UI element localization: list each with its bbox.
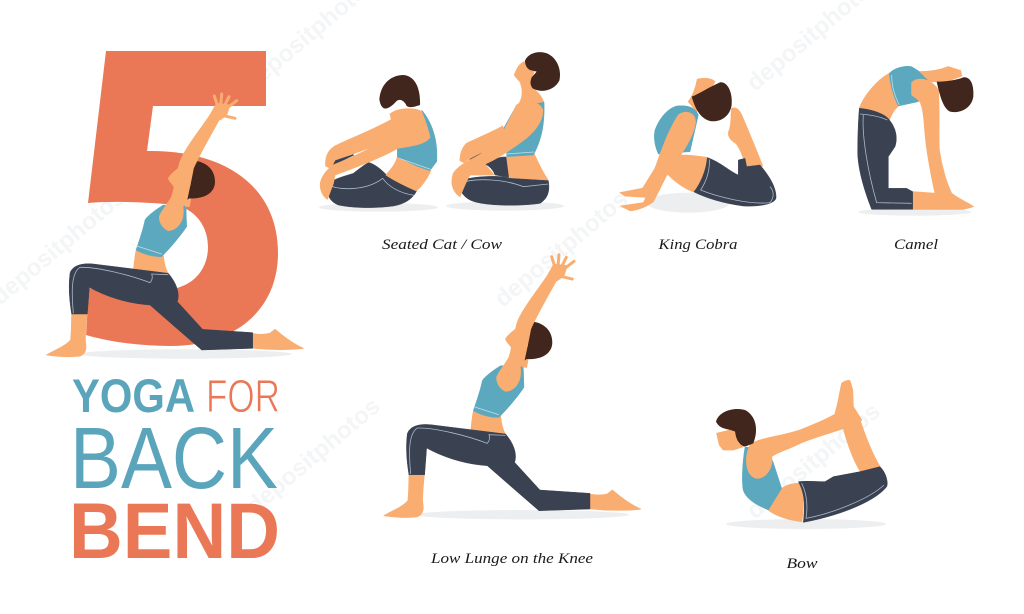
title word: FOR: FOR	[206, 370, 280, 422]
figure: seated cat	[319, 75, 438, 212]
title word: BEND: BEND	[69, 486, 280, 575]
watermarks: depositphotos	[490, 186, 634, 313]
title	[69, 369, 280, 575]
caption: Bow: Bow	[786, 556, 818, 572]
title word: YOGA: YOGA	[72, 369, 195, 422]
figure: seated cow	[446, 52, 564, 211]
figure: bow	[716, 380, 887, 529]
figure: low lunge beside the 5	[47, 94, 303, 359]
big number 5	[86, 51, 278, 346]
figure: camel	[858, 66, 973, 216]
watermarks	[0, 0, 886, 525]
caption: Low Lunge on the Knee: Low Lunge on the Knee	[430, 551, 594, 567]
title word: BACK: BACK	[70, 410, 278, 507]
caption: King Cobra: King Cobra	[657, 237, 738, 253]
watermarks: depositphotos	[742, 398, 886, 525]
watermarks: depositphotos	[242, 393, 386, 520]
caption: Camel: Camel	[894, 237, 938, 253]
figure: king cobra	[620, 78, 776, 213]
figure: low lunge on the knee	[384, 255, 641, 519]
caption: Seated Cat / Cow: Seated Cat / Cow	[382, 237, 502, 253]
